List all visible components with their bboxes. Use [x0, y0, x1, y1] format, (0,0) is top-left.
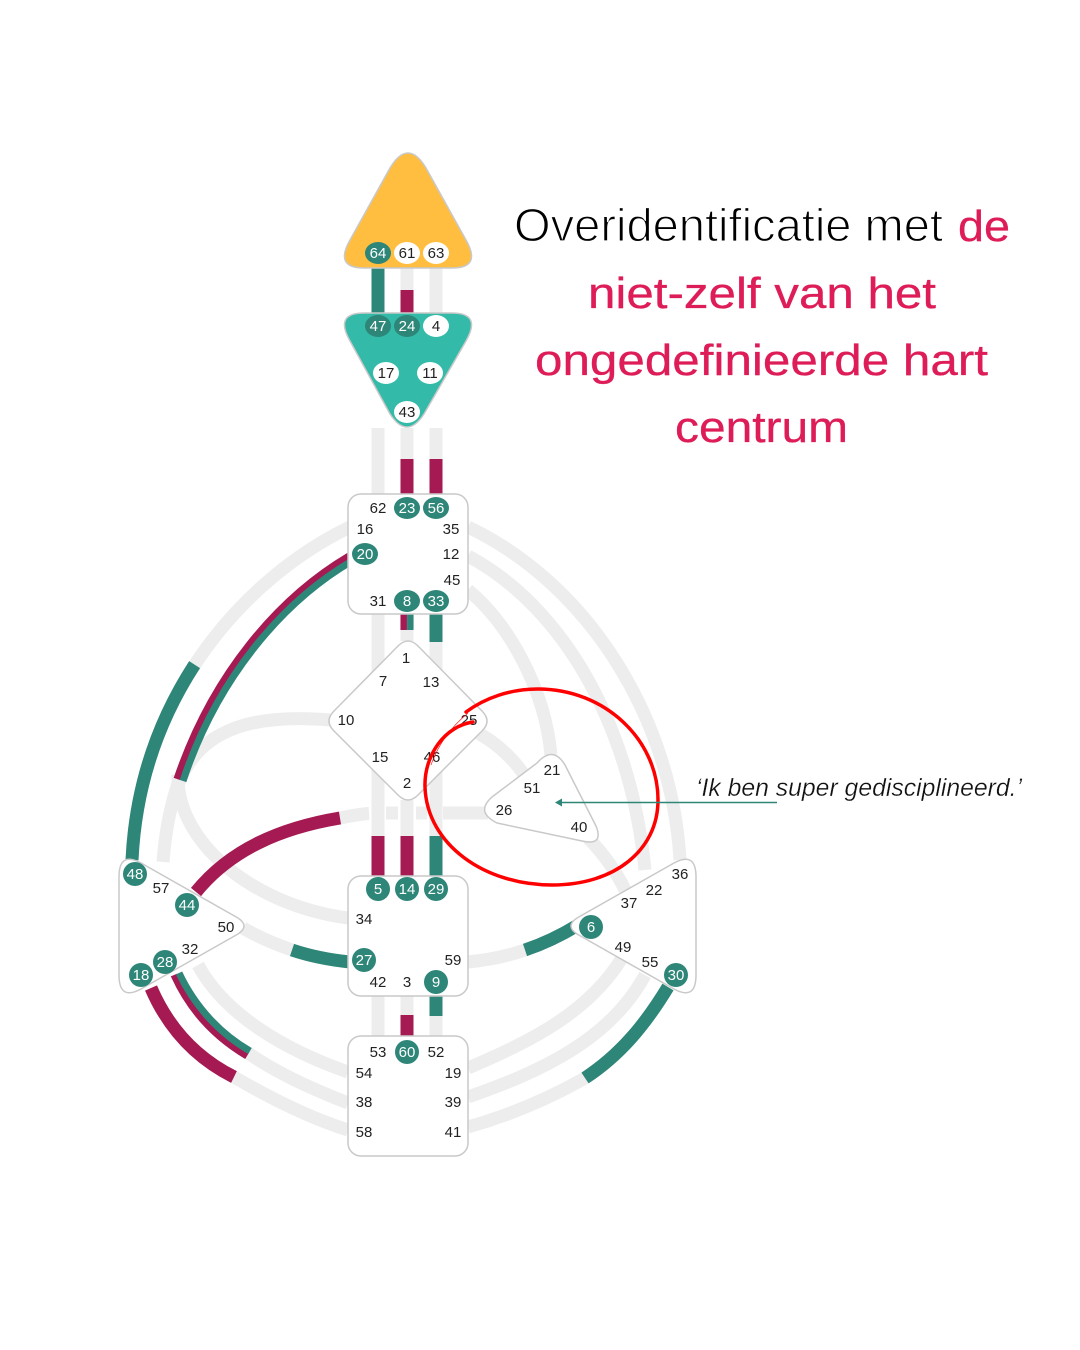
root centre — [348, 1036, 468, 1156]
quote: ‘Ik ben super gedisciplineerd.’ — [696, 774, 1022, 802]
ajna centre: 17 — [378, 365, 394, 382]
throat centre: 23 — [399, 500, 415, 517]
title: de — [958, 202, 1010, 251]
title: ongedefinieerde hart — [535, 336, 988, 385]
throat centre: 20 — [357, 546, 373, 563]
callout circle around ego centre — [425, 689, 658, 885]
head centre: 64 — [370, 245, 386, 262]
spleen centre: 48 — [127, 866, 143, 883]
head centre: 61 — [399, 245, 415, 262]
solar plexus centre: 6 — [587, 919, 595, 936]
root centre: 39 — [445, 1094, 461, 1111]
root centre: 60 — [399, 1044, 415, 1061]
solar plexus centre: 37 — [621, 895, 637, 912]
spleen centre: 50 — [218, 919, 234, 936]
spleen centre: 32 — [182, 941, 198, 958]
spleen centre: 44 — [179, 897, 195, 914]
head centre — [344, 153, 472, 268]
ajna centre: 11 — [422, 365, 438, 382]
throat centre: 31 — [370, 593, 386, 610]
spleen centre — [119, 859, 244, 993]
ego centre: 26 — [496, 802, 512, 819]
spleen centre: 18 — [133, 967, 149, 984]
ajna centre: 4 — [432, 318, 440, 335]
title — [514, 199, 1010, 452]
g centre: 7 — [379, 673, 387, 690]
solar plexus centre: 22 — [646, 882, 662, 899]
sacral centre: 59 — [445, 952, 461, 969]
g centre: 1 — [402, 650, 410, 667]
sacral centre: 42 — [370, 974, 386, 991]
spleen centre: 57 — [153, 880, 169, 897]
g centre: 10 — [338, 712, 354, 729]
solar plexus centre: 49 — [615, 939, 631, 956]
head centre: 63 — [428, 245, 444, 262]
ego centre: 21 — [544, 762, 560, 779]
sacral centre: 34 — [356, 911, 372, 928]
root centre: 52 — [428, 1044, 444, 1061]
active channels — [132, 268, 668, 1078]
ajna centre: 24 — [399, 318, 415, 335]
g centre: 2 — [403, 775, 411, 792]
sacral centre: 5 — [374, 881, 382, 898]
sacral centre — [348, 876, 468, 996]
spleen centre: 28 — [157, 954, 173, 971]
throat centre: 8 — [403, 593, 411, 610]
throat centre: 35 — [443, 521, 459, 538]
inactive grey channels — [132, 268, 680, 1130]
title: niet-zelf van het — [588, 269, 936, 318]
ego centre: 51 — [524, 780, 540, 797]
ego centre — [485, 754, 598, 842]
throat centre: 33 — [428, 593, 444, 610]
g centre: 25 — [461, 712, 477, 729]
g centre: 15 — [372, 749, 388, 766]
title: centrum — [675, 403, 848, 452]
root centre: 38 — [356, 1094, 372, 1111]
ajna centre: 47 — [370, 318, 386, 335]
root centre: 53 — [370, 1044, 386, 1061]
throat centre: 62 — [370, 500, 386, 517]
g centre: 13 — [423, 674, 439, 691]
sacral centre: 3 — [403, 974, 411, 991]
g centre — [329, 641, 487, 800]
ajna centre — [344, 313, 472, 427]
root centre: 58 — [356, 1124, 372, 1141]
sacral centre: 14 — [399, 881, 415, 898]
arrow to ego centre — [555, 798, 777, 806]
g centre: 46 — [424, 749, 440, 766]
sacral centre: 9 — [432, 974, 440, 991]
ajna centre: 43 — [399, 404, 415, 421]
solar plexus centre: 55 — [642, 954, 658, 971]
solar plexus centre: 30 — [668, 967, 684, 984]
title: Overidentificatie met — [514, 199, 943, 251]
throat centre: 56 — [428, 500, 444, 517]
solar plexus centre — [571, 859, 696, 993]
ego centre: 40 — [571, 819, 587, 836]
sacral centre: 27 — [356, 952, 372, 969]
root centre: 41 — [445, 1124, 461, 1141]
throat centre: 12 — [443, 546, 459, 563]
root centre: 19 — [445, 1065, 461, 1082]
bodygraph chart — [119, 153, 696, 1156]
root centre: 54 — [356, 1065, 372, 1082]
sacral centre: 29 — [428, 881, 444, 898]
throat centre — [348, 494, 468, 614]
throat centre: 45 — [444, 572, 460, 589]
solar plexus centre: 36 — [672, 866, 688, 883]
throat centre: 16 — [357, 521, 373, 538]
